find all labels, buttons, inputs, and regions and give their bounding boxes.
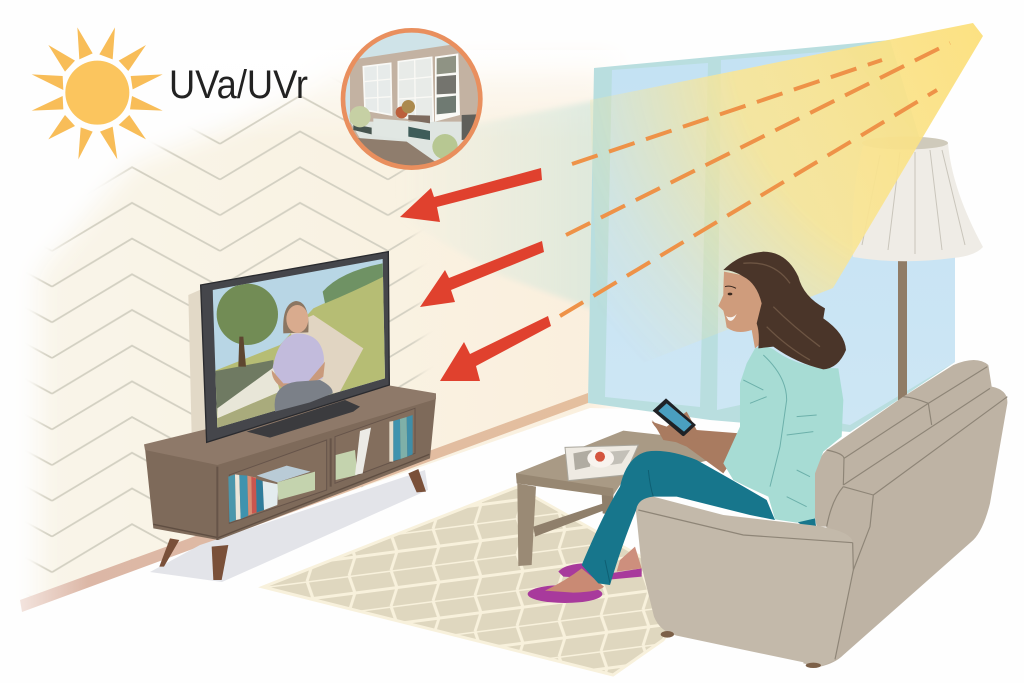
forearm and hands <box>652 412 740 473</box>
shirt <box>723 346 843 523</box>
sofa front arm <box>636 497 853 668</box>
white floor <box>0 408 1024 683</box>
TV stand <box>144 288 436 580</box>
circular window inset <box>340 25 487 175</box>
neck and face <box>718 272 765 348</box>
sofa back <box>803 360 1007 667</box>
wall with chevron pattern <box>29 71 617 596</box>
teal light wash on wall <box>395 100 600 312</box>
floor shadow under TV stand <box>150 470 428 582</box>
window <box>588 40 955 432</box>
phone <box>652 398 703 443</box>
hair <box>723 252 846 369</box>
icon: sun <box>32 27 163 159</box>
red arrows <box>400 168 551 381</box>
stand legs <box>159 538 179 567</box>
baseboard <box>20 393 588 612</box>
heading: UVa/UVr: UVa/UVr <box>169 63 308 107</box>
light beam <box>590 23 983 380</box>
magazine on table <box>565 445 638 481</box>
lamp <box>852 136 983 403</box>
woman <box>528 252 846 603</box>
slippers and feet <box>528 547 642 603</box>
books <box>228 415 413 522</box>
rug <box>263 487 700 675</box>
television <box>201 252 393 442</box>
dashed light rays <box>560 43 950 316</box>
legs <box>582 451 775 585</box>
coffee table <box>516 431 710 566</box>
presenter on screen <box>272 301 333 412</box>
